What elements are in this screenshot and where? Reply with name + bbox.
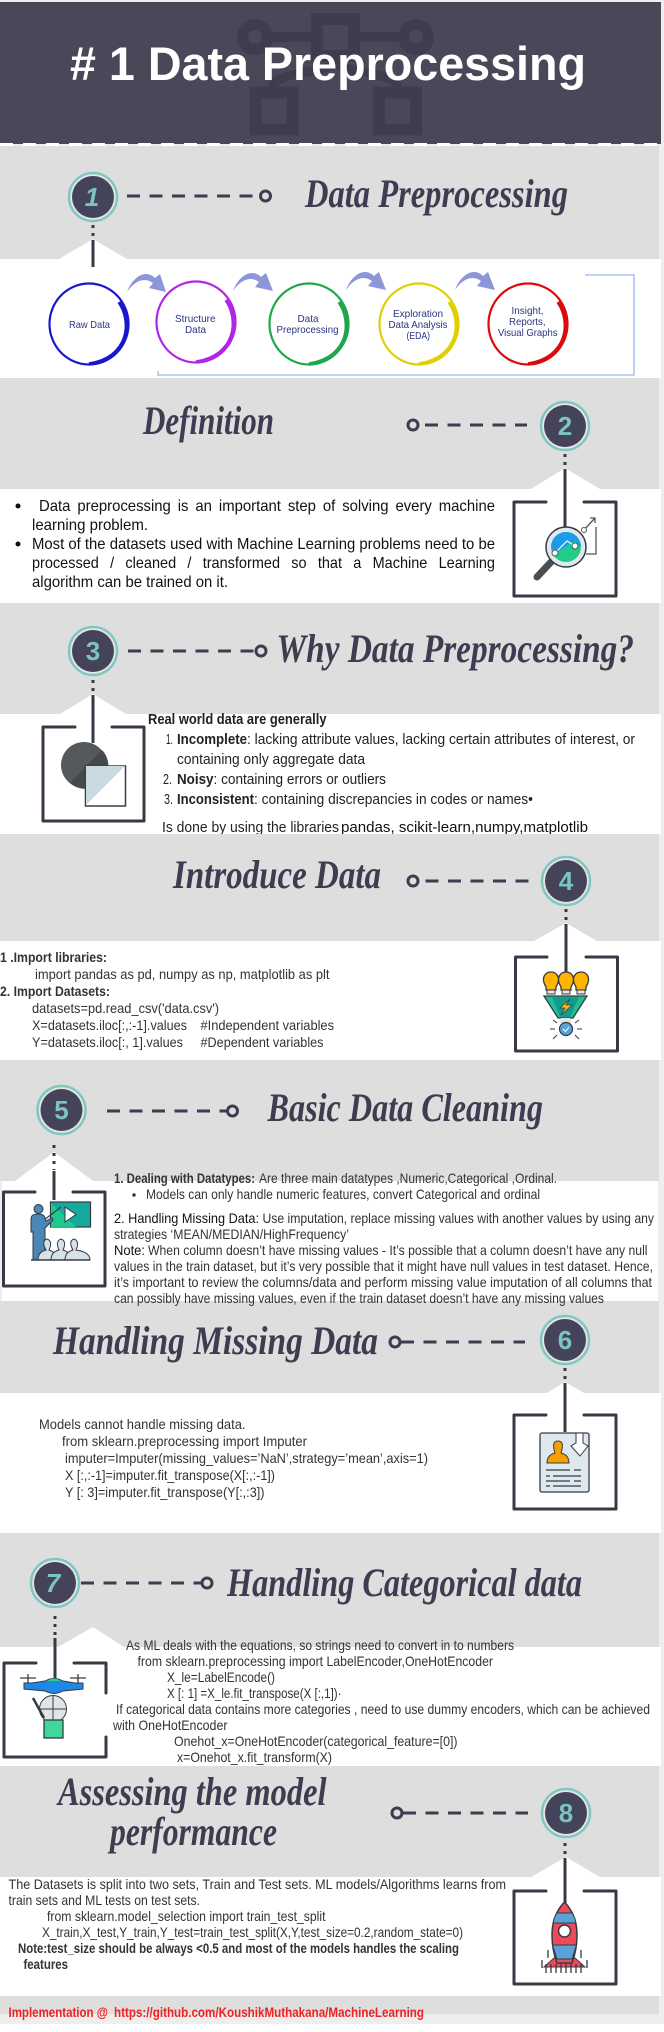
icon: rocket [514,1891,616,1984]
panel: section 5 content [2,1145,658,1301]
text block: why preprocessing: Inconsistent [177,791,254,808]
text block: model performance: features [24,1956,68,1972]
step 4 badge: 4 [559,866,574,896]
heading: Introduce Data: Introduce Data [172,852,381,897]
step 7 badge [31,1559,79,1607]
text block: missing data: imputer=Imputer(missing_values=’NaN’,strategy=’mean’,axis=1) [65,1450,428,1466]
flow: insight reports: Insight, [512,305,544,317]
implementation link text [8,2004,424,2020]
connector [127,191,270,201]
flow: raw data: Raw Data [69,319,110,331]
flow: data preprocessing: Data [298,313,319,325]
text block: data cleaning: Models can only handle numeric features, convert Categorical and ordinal [146,1186,540,1202]
text block: introduce data: #Dependent variables [200,1034,324,1050]
arrow [346,272,386,290]
flow: exploration data analysis: Data Analysis [388,319,448,331]
text block: why preprocessing: Real world data are generally [148,711,327,728]
step 6 badge [541,1316,589,1364]
connector [107,1106,238,1116]
heading: Basic Data Cleaning: Basic Data Cleaning [267,1085,543,1130]
text block: data cleaning: 1. Dealing with Datatypes: [114,1170,255,1186]
panel: section 6 heading band [0,1290,659,1393]
panel: section 4 content [0,909,661,1060]
text block: definition: Most of the datasets used with Machine Learning problems need to be [32,536,495,553]
text block: model performance: The Datasets is split into two sets, Train and Test sets. ML models/Algorithms learns from [8,1876,506,1892]
panel: section 2 content [0,454,661,603]
text block: missing data [39,1416,428,1500]
arrow [127,274,166,292]
text block: model performance: X_train,X_test,Y_train,Y_test=train_test_split(X,Y,test_size=0.2,random_state=0) [42,1924,463,1940]
flow: raw data [50,284,128,364]
step 8 badge: 8 [559,1798,573,1828]
flow: exploration data analysis [380,284,458,364]
panel: section 2 heading band [0,378,659,489]
icon: document over circle [43,727,144,821]
step 7 badge: 7 [46,1568,62,1598]
implementation link text: Implementation @ [8,2004,108,2020]
flow: exploration data analysis: (EDA) [406,330,430,342]
flow: insight reports: Reports, [509,316,546,328]
panel: section 8 heading band [0,1766,659,1877]
text block: model performance: from sklearn.model_selection import train_test_split [47,1908,326,1924]
panel: section 7 heading band [0,1533,659,1647]
flow: structure data [156,282,236,362]
text block: introduce data: datasets=pd.read_csv('data.csv') [32,1000,219,1016]
flow: exploration data analysis: Exploration [393,308,443,320]
text block: missing data: Models cannot handle missing data. [39,1416,246,1432]
heading: Assessing the model performance: performance [108,1809,277,1854]
heading: Handling Categorical data: Handling Categorical data [226,1560,582,1605]
arrow [455,272,495,290]
flow: insight reports: Visual Graphs [498,327,558,339]
heading: Data Preprocessing: Data Preprocessing [304,171,568,216]
feedback bracket [158,275,634,375]
connector [408,420,527,430]
text block: why preprocessing: : lacking attribute values, lacking certain attributes of interest, or [247,731,635,748]
flow: insight reports [488,284,568,364]
text block: model performance: train sets and ML tests on test sets. [8,1892,200,1908]
text block: categorical data: from sklearn.preprocessing import LabelEncoder,OneHotEncoder [138,1653,493,1669]
panel: section 3 heading band [0,603,659,714]
step 3 badge [69,627,117,675]
connector [81,1578,212,1588]
text block: why preprocessing: : containing errors or outliers [214,771,386,788]
overflowing text line: can possibly have missing values, even if the train dataset doesn’t have any missing values [114,1290,604,1306]
text block: introduce data: X=datasets.iloc[:,:-1].values [32,1017,187,1033]
step 2 badge: 2 [558,411,572,441]
icon: bulbs and funnel [516,957,618,1051]
icon: document with user [514,1415,616,1509]
heading: Handling Missing Data: Handling Missing Data [52,1318,378,1363]
step 6 badge: 6 [558,1325,572,1355]
arrow [233,273,273,291]
title: # 1 Data Preprocessing [70,37,586,90]
panel: section 6 content [0,1368,661,1533]
panel: section 4 heading band [0,834,659,941]
panel: section 5 heading band [0,1060,659,1181]
text block: missing data: X [:,:-1]=imputer.fit_transpose(X[:,:-1]) [65,1467,275,1483]
text block: why preprocessing: : containing discrepancies in codes or names• [254,791,533,808]
connector [390,1337,525,1347]
panel: section 8 content [0,1843,661,1996]
text block: categorical data: x=Onehot_x.fit_transform(X) [177,1749,332,1765]
text block: categorical data [112,1637,650,1765]
text block: categorical data: with OneHotEncoder [112,1717,228,1733]
step 3 badge: 3 [86,636,100,666]
implementation link text: https://github.com/KoushikMuthakana/MachineLearning [114,2004,424,2020]
text block: categorical data: As ML deals with the equations, so strings need to convert in to numbers [126,1637,514,1653]
connector [128,646,266,656]
text block: categorical data: X [: 1] =X_le.fit_transpose(X [:,1])· [167,1685,342,1701]
text block: data cleaning: Note: [114,1242,145,1258]
text block: model performance [8,1876,506,1972]
text block: definition: learning problem. [32,517,148,534]
text block: why preprocessing: 1. [166,731,173,748]
icon: header background workflow [242,19,428,130]
panel: section 7 content [0,1616,661,1766]
step 8 badge [542,1789,590,1837]
heading: Definition: Definition [142,398,274,443]
text block: why preprocessing: Is done by using the libraries [162,819,339,836]
text block: data cleaning: strategies ‘MEAN/MEDIAN/HighFrequency’ [114,1226,349,1242]
panel: footer [0,1996,664,2024]
heading: Assessing the model performance: Assessing the model [56,1769,327,1814]
text block: categorical data: Onehot_x=OneHotEncoder(categorical_feature=[0]) [174,1733,458,1749]
text block: introduce data: #Independent variables [200,1017,334,1033]
step 5 badge: 5 [54,1095,69,1125]
text block: why preprocessing: containing only aggregate data [177,751,366,768]
text block: why preprocessing: 3. [164,791,173,808]
text block: categorical data: X_le=LabelEncode() [167,1669,275,1685]
connector [408,876,529,886]
flow: data preprocessing: Preprocessing [276,324,339,336]
text block: introduce data: 2. Import Datasets: [0,983,110,999]
text block: why preprocessing [148,711,635,836]
text block: why preprocessing: Noisy [177,771,214,788]
text block: definition: processed / cleaned / transformed so that a Machine Learning [32,555,495,572]
text block: missing data: from sklearn.preprocessing import Imputer [62,1433,307,1449]
text block: data cleaning: 2. Handling Missing Data: [114,1210,259,1226]
flow: data preprocessing [270,284,348,364]
step 1 badge [69,173,117,221]
text block: model performance: Note:test_size should be always <0.5 and most of the models handles the scaling [18,1940,459,1956]
step 4 badge [542,857,590,905]
panel: section 1 content [0,225,661,378]
step 5 badge [38,1086,86,1134]
text block: why preprocessing: Incomplete [177,731,247,748]
text block: introduce data [0,949,334,1050]
icon: delivery drone [4,1663,106,1757]
icon: presenter [4,1192,105,1286]
icon: magnifier [514,502,616,596]
panel: section 3 content [0,680,661,836]
text block: missing data: Y [: 3]=imputer.fit_transpose(Y[:,:3]) [65,1484,264,1500]
step 1 badge: 1 [85,182,99,212]
text block: data cleaning: Are three main datatypes ,Numeric,Categorical ,Ordinal. [259,1170,557,1186]
text block: definition [16,498,495,591]
panel: section 1 heading band [0,146,659,259]
text block: why preprocessing: pandas, scikit-learn,numpy,matplotlib [341,819,588,836]
panel: header [0,2,661,144]
text block: definition: Data preprocessing is an important step of solving every machine [39,498,495,515]
flow: structure data: Structure [175,313,216,325]
text block: data cleaning [114,1170,654,1290]
step 2 badge [541,402,589,450]
text block: why preprocessing: 2. [163,771,172,788]
text block: introduce data: import pandas as pd, numpy as np, matplotlib as plt [35,966,330,982]
text block: introduce data: Y=datasets.iloc[:, 1].values [32,1034,183,1050]
text block: introduce data: 1 .Import libraries: [0,949,107,965]
connector [392,1808,528,1818]
heading: Assessing the model performance [56,1769,327,1854]
text block: definition: algorithm can be trained on it. [32,574,228,591]
flow: structure data: Data [185,324,206,336]
